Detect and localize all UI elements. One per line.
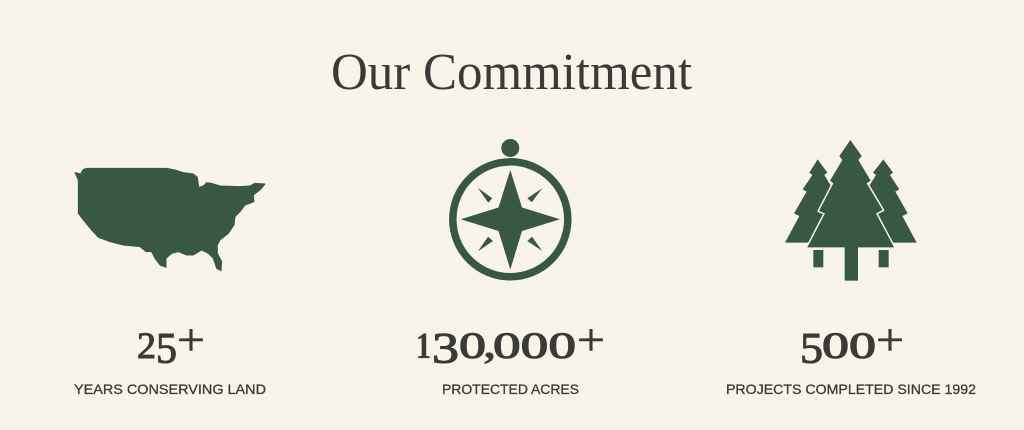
stat: 500+: +: [876, 314, 904, 365]
icon: compass: [453, 139, 568, 277]
label: protected acres: PROTECTED ACRES: [442, 381, 579, 397]
icon: three pine trees: [785, 140, 917, 281]
stat: 25+: 2: [137, 326, 156, 367]
title: Our Commitment: [331, 44, 693, 101]
stat: 500+: [800, 314, 904, 372]
stat: 130,000+: ,: [484, 326, 495, 367]
stat: 500+: 5: [800, 326, 823, 372]
stat: 130,000+: +: [577, 314, 605, 365]
label: projects completed since 1992: PROJECTS COMPLETED SINCE 1992: [726, 381, 976, 397]
stat: 500+: 00: [822, 326, 876, 367]
stat: 130,000+: 000: [493, 326, 576, 367]
icon: map of the United States: [75, 168, 265, 271]
panel: projects completed: [726, 140, 976, 397]
stat: 130,000+: 3: [432, 326, 459, 372]
stat: 25+: [137, 314, 205, 372]
panel: protected acres: [416, 139, 605, 397]
stat: 130,000+: [416, 314, 605, 372]
stat: 25+: +: [177, 314, 205, 365]
panel: years conserving land: [74, 168, 266, 397]
stat: 130,000+: 0: [459, 326, 486, 367]
label: years conserving land: YEARS CONSERVING LAND: [74, 381, 266, 397]
stat: 130,000+: 1: [416, 326, 431, 367]
stat: 25+: 5: [156, 326, 177, 372]
